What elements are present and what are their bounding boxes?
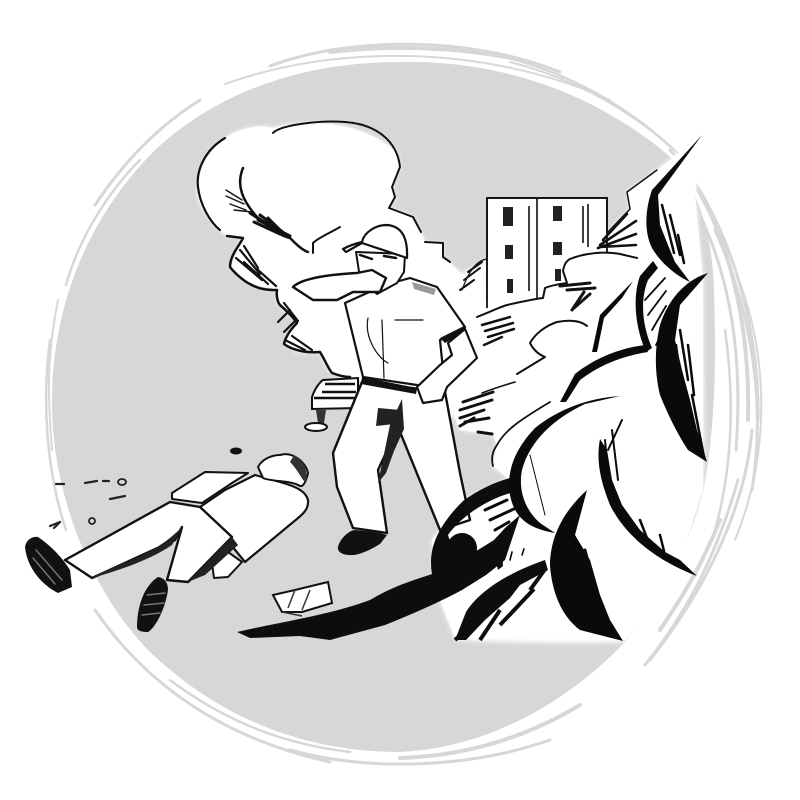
handkerchief on ground: [273, 582, 332, 616]
smoke outlines: upper left cloud: [198, 122, 450, 377]
third arc: [636, 261, 658, 352]
wrecked vehicle: [305, 378, 358, 431]
building upper windows over smoke correction: [487, 198, 607, 309]
collapsed man on the ground: [25, 448, 308, 632]
fourth arc: [592, 281, 633, 352]
shoe: [338, 530, 387, 555]
smoke outlines: middle right clouds: [460, 170, 657, 466]
fifth arc: [560, 345, 648, 402]
bottom billow: [550, 490, 623, 641]
man standing, hand over mouth: [293, 225, 477, 555]
black smoke puffs: foreground: [237, 478, 548, 640]
trousers: [333, 382, 470, 533]
white smoke mass: [197, 123, 704, 643]
top billow: [646, 135, 702, 282]
white smoke billows: ink contours and hatching: [509, 135, 708, 641]
right arm on hip: [417, 329, 477, 403]
big billow: [509, 396, 620, 533]
building: [487, 198, 607, 310]
raised forearm: [293, 270, 386, 300]
inner curl: [598, 439, 697, 576]
head: [356, 252, 405, 294]
hatch strokes over billows: [485, 205, 704, 605]
second billow: [656, 273, 708, 462]
cap: [343, 225, 407, 258]
shirt torso: [345, 278, 465, 390]
